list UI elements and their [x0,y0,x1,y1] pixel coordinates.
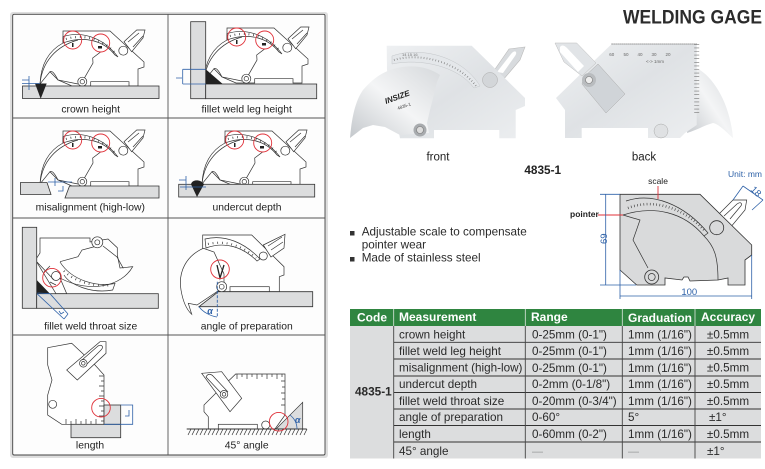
table measurement column: 45° angle [399,445,449,458]
panel: undercut depth: undercut depth [212,203,282,214]
panel: fillet weld throat size [22,227,158,333]
table graduation column [628,328,692,458]
table range column: 0-60mm (0-2") [532,428,607,441]
feature list [350,226,527,265]
table measurement column: undercut depth [399,378,477,391]
photo: gauge back: 30 [651,52,657,57]
table range column: 0-60° [532,411,560,424]
table accuracy column: ±1° [707,445,725,458]
table header: Accuracy [701,310,755,324]
panel: angle of preparation: angle of preparation [201,322,293,333]
table header: Graduation [628,311,692,325]
table accuracy column: ±0.5mm [707,395,749,408]
panel: undercut depth [179,130,315,214]
panel: misalignment (high-low) [20,130,159,214]
feature list: Made of stainless steel [362,252,481,265]
table range column: — [532,446,543,458]
table range column: 0-25mm (0-1") [532,328,607,342]
table graduation column: 1mm (1/16") [628,378,692,391]
panel: length: length [76,441,104,452]
table measurement column: fillet weld throat size [399,395,504,408]
panel: angle of preparation [180,234,313,333]
photo: gauge back: 60 [609,52,615,57]
panel: crown height: crown height [61,104,120,116]
panel: misalignment (high-low): misalignment (high-low) [36,203,145,214]
photo: gauge back [555,43,733,138]
photo: gauge back: 20 [665,52,671,57]
panel: fillet weld leg height: fillet weld leg height [202,104,292,116]
table range column: 0-20mm (0-3/4") [532,395,617,408]
table measurement column: misalignment (high-low) [399,362,523,374]
table measurement column: angle of preparation [399,411,503,424]
dimension drawing: scale [648,176,668,186]
panel: length [48,342,133,452]
table header: Range [531,310,568,324]
table range column: 0-25mm (0-1") [532,362,607,375]
table measurement column: crown height [399,328,466,342]
panel: 45° angle: α [295,415,301,425]
dimension drawing: Unit: mm [728,169,762,179]
photo: gauge back: <-> 1mm [646,59,664,64]
table graduation column: 5° [628,411,639,424]
table header: Code [357,310,387,324]
table graduation column: — [628,446,639,458]
table graduation column: 1mm (1/16") [628,428,692,441]
table range column: 0-25mm (0-1") [532,345,607,358]
table code cell: 4835-1 [355,385,392,399]
table accuracy column [707,328,749,458]
photo: gauge back: 50 [623,52,629,57]
caption: front: front [426,152,450,164]
panel: fillet weld throat size: fillet weld throat size [44,322,138,333]
panel: crown height [22,30,159,116]
table accuracy column: ±0.5mm [707,428,749,441]
panel: 45° angle [187,372,307,452]
photo: gauge front: 4835-1 [397,101,412,111]
table measurement column: length [399,428,431,441]
table graduation column: 1mm (1/16") [628,362,692,375]
table header [357,310,755,325]
feature list: pointer wear [362,239,426,252]
table accuracy column: ±1° [709,411,727,424]
dimension drawing: 18 [748,184,763,200]
photo: gauge back: 40 [637,52,643,57]
specification table [350,309,761,458]
table graduation column: 1mm (1/16") [628,345,692,358]
table header: Measurement [399,310,476,324]
table range column: 0-2mm (0-1/8") [532,378,610,391]
table measurement column: fillet weld leg height [399,345,502,358]
photo: gauge front: INSIZE [384,88,412,106]
table accuracy column: ±0.5mm [707,362,749,374]
dimension drawing: 100 [681,287,697,298]
table measurement column [399,328,523,458]
table graduation column: 1mm (1/16") [628,328,692,342]
dimension drawing [570,169,763,299]
table range column [532,328,617,458]
table graduation column: 1mm (1/16") [628,395,692,408]
panel: angle of preparation: α [207,306,213,316]
dimension drawing: 69 [599,233,610,244]
table accuracy column: ±0.5mm [707,378,749,391]
panel: 45° angle: 45° angle [225,441,269,452]
table accuracy column: ±0.5mm [707,328,749,342]
dimension drawing: pointer [570,209,599,219]
table accuracy column: ±0.5mm [707,345,749,358]
panel: fillet weld leg height [176,22,317,116]
frame: usage diagrams [10,12,328,458]
photo: gauge front [350,46,525,138]
photo: gauge front: 14 15 16 [402,52,418,57]
caption: back: back [632,152,656,164]
model code: 4835-1 [524,163,562,177]
feature list: Adjustable scale to compensate [362,226,527,239]
